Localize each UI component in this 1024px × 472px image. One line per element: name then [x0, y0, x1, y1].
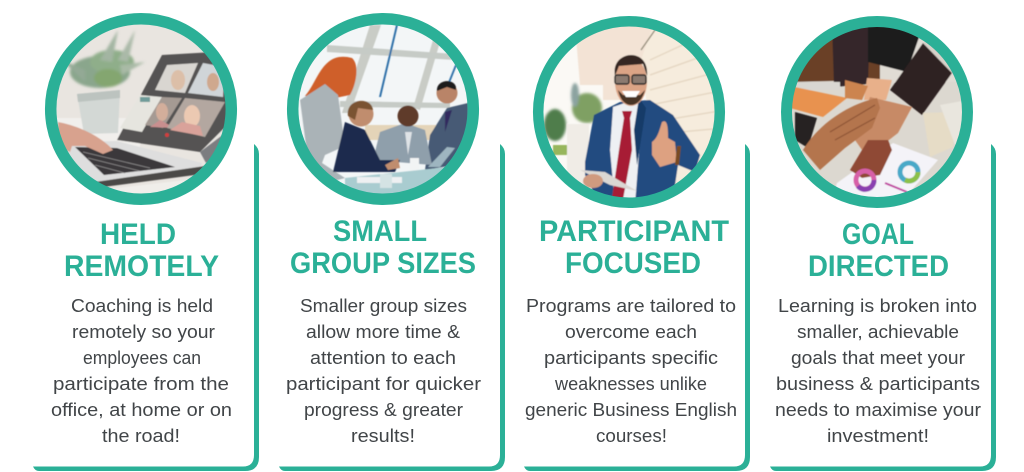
body text: attention to each	[310, 347, 456, 368]
heading: PARTICIPANT	[539, 215, 729, 248]
panel: small group sizes	[279, 19, 505, 471]
hand	[58, 122, 113, 154]
heading	[808, 218, 949, 283]
body text: participant for quicker	[286, 373, 481, 394]
book	[923, 112, 955, 157]
man right	[425, 103, 468, 170]
body text: Coaching is held	[71, 295, 213, 316]
body text: overcome each	[565, 321, 697, 342]
heading	[539, 215, 729, 280]
body text: smaller, achievable	[797, 321, 959, 342]
woman	[305, 57, 356, 98]
photo: businessman thumbs up	[544, 26, 714, 198]
photo: stacked hands	[792, 27, 962, 197]
tablet	[795, 112, 817, 148]
chart donuts	[900, 163, 918, 181]
laptop keyboard	[62, 141, 202, 184]
laptop	[428, 147, 455, 167]
laptop screen	[117, 51, 232, 152]
heading	[290, 215, 476, 280]
table	[344, 167, 444, 194]
heading: DIRECTED	[808, 250, 949, 283]
body text: progress & greater	[304, 399, 463, 420]
photo: laptop video call	[56, 24, 226, 194]
plant	[62, 30, 145, 88]
heading: SMALL	[333, 215, 427, 248]
body text: office, at home or on	[51, 399, 232, 420]
body text: allow more time &	[306, 321, 461, 342]
tablet	[580, 170, 637, 191]
body text: weaknesses unlike	[554, 373, 707, 394]
man	[585, 100, 700, 205]
upper wrist	[864, 78, 892, 100]
heading: FOCUSED	[565, 247, 701, 280]
body text: results!	[351, 425, 415, 446]
heading: GOAL	[842, 218, 914, 251]
body text: generic Business English	[525, 399, 737, 420]
ring	[293, 19, 473, 199]
ring	[786, 22, 968, 202]
hands	[855, 97, 912, 150]
card border	[33, 144, 259, 471]
body text: remotely so your	[72, 321, 215, 342]
heading: REMOTELY	[64, 250, 219, 283]
heading	[64, 218, 219, 283]
man center	[373, 123, 432, 165]
left arm	[790, 86, 847, 117]
body text: courses!	[596, 425, 667, 446]
body text: Learning is broken into	[778, 295, 977, 316]
body text	[525, 295, 737, 446]
body text: employees can	[83, 347, 201, 368]
heading: GROUP SIZES	[290, 247, 476, 280]
body text	[775, 295, 981, 446]
card border	[279, 144, 505, 471]
body text: goals that meet your	[791, 347, 965, 368]
body text: needs to maximise your	[775, 399, 981, 420]
paper	[836, 142, 938, 197]
ring	[51, 19, 231, 199]
body text: investment!	[827, 425, 929, 446]
man left	[333, 122, 400, 172]
body text: Programs are tailored to	[526, 295, 736, 316]
heading: HELD	[100, 218, 176, 251]
body text	[286, 295, 481, 446]
panel: participant focused	[524, 20, 750, 471]
thumbs up	[652, 121, 677, 167]
body text: business & participants	[776, 373, 980, 394]
panel: goal directed	[770, 20, 996, 471]
ring	[538, 21, 720, 203]
photo: business meeting	[298, 24, 468, 194]
panel: held remotely	[33, 19, 259, 471]
body text	[51, 295, 232, 446]
body text: participate from the	[53, 373, 229, 394]
body text: the road!	[102, 425, 180, 446]
body text: participants specific	[544, 347, 718, 368]
card border	[770, 144, 996, 471]
card border	[524, 144, 750, 471]
body text: Smaller group sizes	[300, 295, 467, 316]
